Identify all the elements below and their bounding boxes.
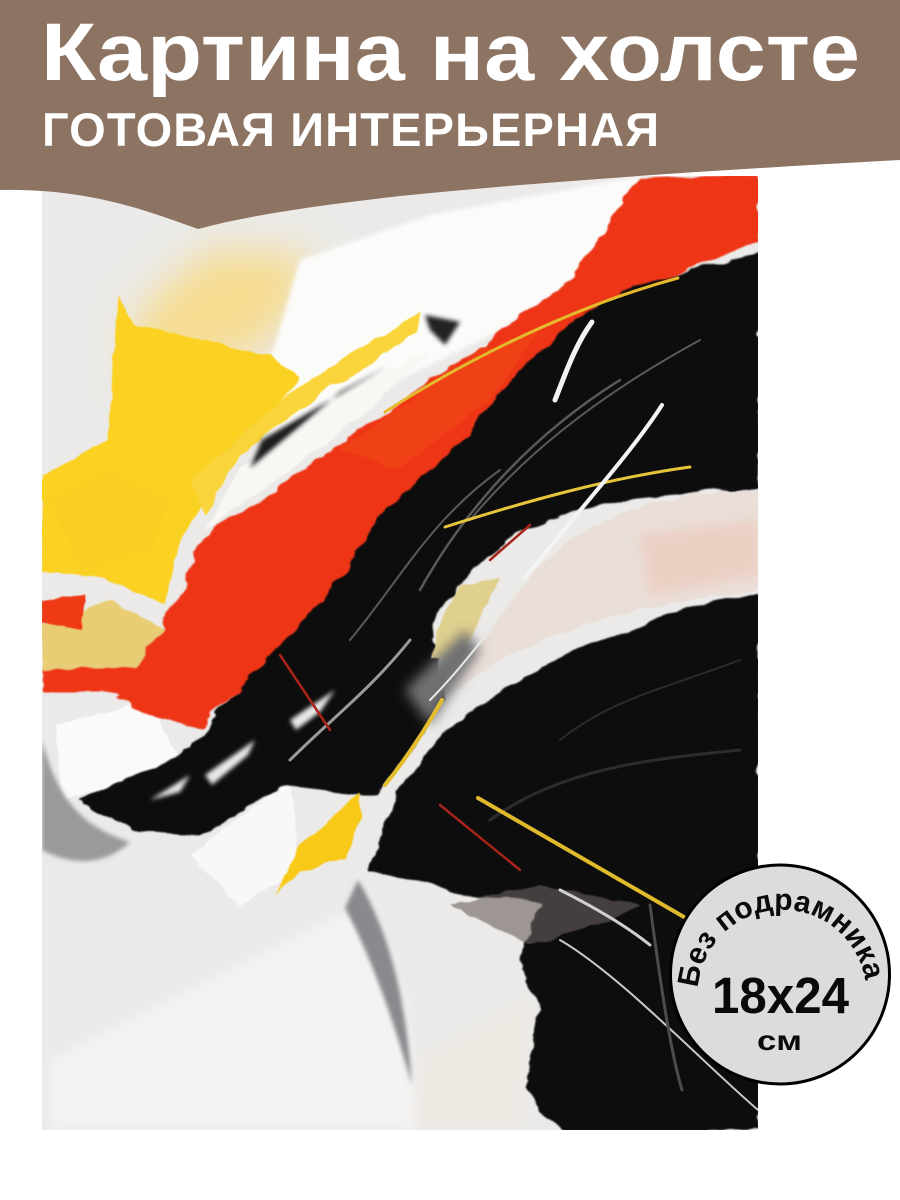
lower-left white and grey strokes xyxy=(55,700,180,800)
black stripes lower left xyxy=(250,366,388,468)
title: Картина на холсте xyxy=(41,7,860,98)
black stroke upper right xyxy=(78,255,760,835)
fine paint lines xyxy=(280,278,758,1110)
grey smoke xyxy=(405,630,480,725)
white impasto top xyxy=(270,176,639,431)
pale yellow wash xyxy=(130,250,310,380)
size badge xyxy=(669,864,891,1086)
subtitle: ГОТОВАЯ ИНТЕРЬЕРНАЯ xyxy=(42,103,659,156)
canvas base xyxy=(42,176,758,1130)
header banner xyxy=(0,0,900,229)
pale beige patch left xyxy=(42,600,165,672)
painting: abstract canvas xyxy=(42,174,760,1132)
red diagonal band xyxy=(42,174,760,728)
black mass lower right xyxy=(370,592,760,1132)
beige patch xyxy=(432,578,500,660)
white streak under yellow xyxy=(206,386,390,530)
yellow flake xyxy=(276,793,362,895)
badge size: 18x24 xyxy=(712,967,850,1024)
badge circle xyxy=(670,865,890,1084)
badge unit: см xyxy=(757,1025,802,1056)
dark grey streaks xyxy=(290,340,740,820)
pale arc band xyxy=(445,490,760,700)
white flecks in the lower-left black stroke xyxy=(150,690,335,800)
badge curved label: Без подрамника xyxy=(677,894,880,986)
yellow paint area xyxy=(42,295,420,605)
pinkish grey streaks xyxy=(450,885,640,945)
